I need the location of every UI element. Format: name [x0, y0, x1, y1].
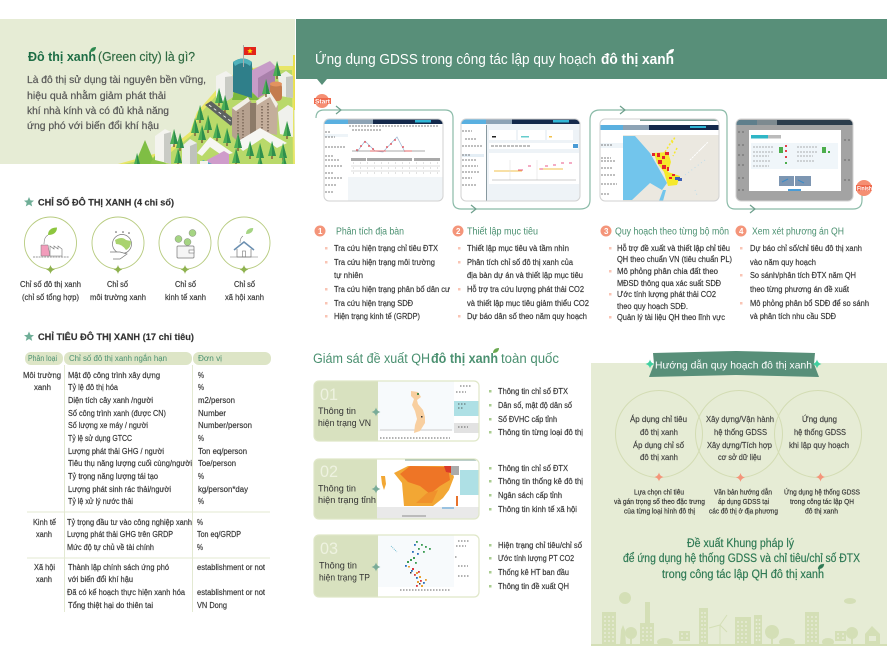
text: circle captions: Lựa chọn chỉ tiêu: [634, 488, 684, 496]
text: circle captions: đô thị xanh: [805, 508, 838, 516]
table rows: Xã hội: [34, 563, 55, 572]
table rows: %: [198, 472, 204, 481]
index: environment: Chỉ số: [107, 280, 128, 289]
text: circle captions: Ứng dụng hệ thống GDSS: [784, 488, 860, 496]
table rows: %: [198, 383, 204, 392]
step 3: sector planning: 3: [604, 227, 609, 236]
step 3: sector planning: QH theo chuẩn VN (tiêu chuẩn PL): [617, 255, 732, 264]
step 2: goal setting: 2: [456, 227, 461, 236]
index: society: [218, 217, 270, 302]
text: legal framework proposal: [623, 538, 860, 581]
header banner: GDSS application: Ứng dụng GDSS trong công tác lập quy hoạch: [315, 51, 596, 68]
table rows: Mức độ tự chủ về tài chính: [67, 543, 154, 552]
table rows: establishment or not: [197, 588, 266, 597]
table rows: %: [197, 543, 203, 552]
badge: start: Start: [315, 100, 330, 106]
badge: finish: Finish: [857, 186, 872, 192]
card 01: national status: 01: [320, 385, 338, 404]
step 2: goal setting: Dự báo dân số theo năm quy hoạch: [467, 312, 587, 321]
step 1: area analysis: Hiện trạng kinh tế (GRDP): [334, 312, 420, 321]
step 1: area analysis: Phân tích địa bàn: [336, 226, 404, 238]
table rows: Tỷ lệ xử lý nước thải: [68, 497, 133, 506]
text: circle captions: [614, 488, 860, 516]
step 2: goal setting: Thiết lập mục tiêu: [467, 226, 538, 238]
step 4: plan review: 4: [739, 227, 744, 236]
header banner: GDSS application: [296, 19, 887, 85]
table rows: %: [197, 518, 203, 527]
illustration: city skyline: [591, 592, 887, 646]
step 3: sector planning: theo quy hoạch SDĐ.: [617, 302, 688, 311]
text: circle captions: Văn bản hướng dẫn: [714, 488, 772, 496]
index: society: xã hội xanh: [225, 293, 264, 302]
index: environment: [90, 217, 146, 302]
text: circle captions: và gán trọng số theo đặc trưng: [614, 497, 705, 506]
table rows: Diện tích cây xanh /người: [68, 396, 153, 405]
card 03: city status: 03: [320, 539, 338, 558]
table rows: Số công trình xanh (được CN): [68, 409, 166, 418]
screenshot 4: plan review modal: [736, 119, 853, 201]
index: economy: Chỉ số: [175, 280, 196, 289]
index: composite: Chỉ số đô thị xanh: [20, 280, 81, 289]
text: circle captions: của từng loại hình đô thị: [624, 508, 695, 516]
circle: apply indicators: [616, 390, 702, 482]
circle: build GDSS system: hệ thống GDSS: [714, 427, 767, 437]
screenshot 3: land use map: [600, 119, 719, 201]
table rows: establishment or not: [197, 563, 266, 572]
circle: apply GDSS: [774, 390, 862, 482]
index: composite: [20, 217, 81, 302]
step 4: plan review: [736, 226, 869, 321]
badge: start: [314, 94, 331, 108]
text: legal framework proposal: để ứng dụng hệ thống GDSS và chỉ tiêu/chỉ số ĐTX: [623, 553, 860, 565]
table rows: Môi trường: [23, 371, 61, 380]
card 01: national status: hiện trạng VN: [318, 418, 371, 429]
card 03 bullets: Hiện trạng chỉ tiêu/chỉ số: [498, 541, 583, 550]
table rows: Tổng thiệt hại do thiên tai: [68, 601, 153, 610]
card 03 bullets: Ước tính lượng PT CO2: [498, 554, 574, 563]
table rows: Ton eq/person: [198, 447, 247, 456]
step 1: area analysis: [314, 226, 451, 321]
card 01 bullets: Số ĐVHC cấp tỉnh: [498, 415, 557, 424]
step 2: goal setting: Phân tích chỉ số đô thị xanh của: [467, 258, 574, 267]
table rows: Toe/person: [198, 459, 236, 468]
circle: apply GDSS: hệ thống GDSS: [794, 427, 846, 437]
step 3: sector planning: MĐSD thông qua xác suất SDĐ: [617, 279, 721, 288]
table rows: xanh: [36, 575, 52, 584]
panel: green city intro: [0, 19, 295, 173]
circle: build GDSS system: cơ sở dữ liệu: [718, 452, 761, 462]
table rows: kg/person*day: [198, 485, 248, 494]
table rows: Lượng phát sinh rác thải/người: [68, 485, 171, 494]
step 3: sector planning: Quy hoạch theo từng bộ môn: [615, 226, 729, 238]
table rows: Lượng phát thải GHG / người: [68, 447, 164, 456]
table rows: %: [198, 434, 204, 443]
index: environment: môi trường xanh: [90, 293, 146, 302]
text: circle captions: trong công tác lập QH: [790, 499, 854, 506]
table header: Phân loại: [28, 354, 57, 363]
text: definition paragraph: [27, 74, 206, 132]
screenshot 2: goal setting dashboard: [461, 119, 580, 201]
step 3: sector planning: Ước tính lượng phát thải CO2: [617, 290, 717, 299]
table rows: Ton eq/GRDP: [197, 530, 241, 539]
card 02: provincial status: hiện trạng tỉnh: [318, 495, 376, 506]
table: green city indicators: [23, 331, 271, 612]
card 02: provincial status: 02: [320, 462, 338, 481]
panel: green city indexes: [20, 196, 270, 302]
step 4: plan review: Mô phỏng phân bổ SDĐ để so sánh: [750, 299, 869, 308]
step 3: sector planning: Quản lý tài liệu QH theo lĩnh vực: [617, 313, 725, 322]
table rows: Tiêu thụ năng lượng cuối cùng/người: [68, 459, 192, 468]
circle: build GDSS system: Xây dựng/Tích hợp: [707, 440, 772, 450]
step 4: plan review: vào năm quy hoạch: [750, 258, 816, 267]
step 1: area analysis: Tra cứu hiện trạng SDĐ: [334, 299, 413, 308]
table rows: Tỷ lệ sử dụng GTCC: [68, 434, 132, 443]
step 1: area analysis: Tra cứu hiện trạng môi trường: [334, 258, 435, 267]
table rows: VN Dong: [197, 601, 227, 610]
step 1: area analysis: Tra cứu hiện trạng chỉ tiêu ĐTX: [334, 244, 439, 253]
card 02 bullets: Thông tin chỉ số ĐTX: [498, 464, 569, 473]
heading: four indexes: CHỈ SỐ ĐÔ THỊ XANH (4 chỉ số): [38, 196, 174, 208]
table rows: %: [198, 371, 204, 380]
text: definition paragraph: ứng phó với biến đổi khí hậu: [27, 120, 159, 132]
ribbon heading: [646, 351, 822, 377]
card 03 bullets: Thông tin đề xuất QH: [498, 582, 569, 591]
index: society: Chỉ số: [234, 280, 255, 289]
step 1: area analysis: tự nhiên: [334, 271, 363, 280]
circle: apply indicators: Áp dụng chỉ số: [633, 440, 684, 450]
table rows: Kinh tế: [33, 518, 57, 527]
circle: build GDSS system: Xây dựng/Vận hành: [706, 414, 774, 424]
table rows: Number: [198, 409, 226, 418]
table header: Đơn vị: [198, 354, 222, 363]
table rows: Số lượng xe máy / người: [68, 421, 148, 430]
text: legal framework proposal: trong công tác lập QH đô thị xanh: [662, 569, 824, 581]
heading: what is a green city: (Green city) là gì?: [98, 50, 195, 64]
heading: nationwide monitoring: đô thị xanh: [431, 351, 498, 366]
step 4: plan review: và phân tích nhu cầu SDĐ: [750, 312, 836, 321]
step 2: goal setting: và thiết lập mục tiêu giảm thiểu CO2: [467, 299, 590, 308]
card 02: provincial status: [314, 459, 479, 519]
index: economy: [159, 217, 211, 302]
card 02: provincial status: Thông tin: [318, 484, 356, 494]
table rows: Lượng phát thải GHG trên GRDP: [67, 530, 173, 539]
card 01 bullets: Dân số, mật độ dân số: [498, 401, 572, 410]
table rows: với biến đổi khí hậu: [68, 575, 133, 584]
card 01 bullets: Thông tin từng loại đô thị: [498, 428, 583, 437]
illustration: isometric green city: [118, 45, 295, 173]
ribbon heading: Hướng dẫn quy hoạch đô thị xanh: [655, 358, 812, 372]
step 3: sector planning: Mô phỏng phân chia đất theo: [617, 267, 719, 276]
table rows: Tỷ lệ đô thị hóa: [68, 383, 118, 392]
step 1: area analysis: 1: [318, 227, 323, 236]
heading: what is a green city: [28, 47, 195, 64]
flow arrow: start to finish: [316, 106, 862, 213]
heading: nationwide monitoring: toàn quốc: [501, 351, 559, 366]
text: circle captions: áp dụng GDSS tại: [718, 499, 769, 506]
step 2: goal setting: Hỗ trợ tra cứu lượng phát thải CO2: [467, 285, 585, 294]
step 4: plan review: theo từng phương án đề xuất: [750, 285, 850, 294]
table rows: Thành lập chính sách ứng phó: [68, 563, 170, 572]
circle: apply indicators: đô thị xanh: [640, 427, 678, 437]
text: legal framework proposal: Đề xuất Khung pháp lý: [687, 538, 794, 550]
table rows: Mật độ công trình xây dựng: [68, 371, 160, 380]
index: economy: kinh tế xanh: [165, 293, 206, 302]
card 02 bullets: Ngân sách cấp tỉnh: [498, 491, 562, 500]
step 2: goal setting: địa bàn dự án và thiết lập mục tiêu: [467, 271, 583, 280]
circle: build GDSS system: [696, 390, 782, 482]
table rows: Đã có kế hoạch thực hiện xanh hóa: [67, 588, 186, 597]
step 2: goal setting: Thiết lập mục tiêu và tầm nhìn: [467, 244, 569, 253]
header banner: GDSS application: đô thị xanh: [601, 51, 674, 68]
card 03: city status: hiện trạng TP: [319, 572, 370, 584]
text: definition paragraph: hiệu quả nhằm giảm phát thải: [27, 89, 166, 102]
badge: finish: [856, 180, 872, 196]
step 3: sector planning: [600, 226, 732, 322]
step 2: goal setting: [452, 226, 590, 321]
circle: apply GDSS: Ứng dụng: [802, 414, 837, 424]
icon: Vietnamese flag: [243, 45, 256, 67]
table rows: %: [198, 497, 204, 506]
text: definition paragraph: Là đô thị sử dụng tài nguyên bền vững,: [27, 74, 206, 86]
heading: 17 indicators: CHỈ TIÊU ĐÔ THỊ XANH (17 chỉ tiêu): [38, 331, 194, 343]
table header: [25, 352, 271, 365]
card 03 bullets: [489, 541, 583, 591]
table rows: xanh: [36, 530, 52, 539]
circle: apply indicators: đô thị xanh: [640, 452, 678, 462]
card 03: city status: [314, 535, 479, 597]
card 03 bullets: Thống kê HT ban đầu: [498, 568, 569, 577]
table rows: m2/person: [198, 396, 235, 405]
step 1: area analysis: Tra cứu hiện trạng phân bố dân cư: [334, 285, 451, 294]
table rows: Tỷ trọng đầu tư vào công nghiệp xanh: [67, 518, 192, 527]
panel: planning guidance: [591, 351, 887, 646]
step 4: plan review: Dự báo chỉ số/chỉ tiêu đô thị xanh: [750, 244, 862, 253]
card 01 bullets: [489, 387, 583, 437]
card 03: city status: Thông tin: [319, 560, 357, 572]
text: definition paragraph: khí nhà kính và có đủ khả năng: [27, 105, 169, 117]
heading: what is a green city: Đô thị xanh: [28, 50, 96, 64]
card 01: national status: Thông tin: [318, 406, 356, 417]
index: composite: (chỉ số tổng hợp): [22, 293, 79, 302]
circle: apply indicators: Áp dụng chỉ tiêu: [630, 414, 687, 424]
card 01 bullets: Thông tin chỉ số ĐTX: [498, 387, 569, 396]
screenshot 1: area analysis dashboard: [324, 119, 443, 201]
card 01: national status: [314, 381, 479, 441]
card 02 bullets: Thông tin thống kê đô thị: [498, 477, 583, 486]
card 02 bullets: [489, 464, 583, 514]
table rows: [23, 371, 266, 610]
step 4: plan review: Xem xét phương án QH: [752, 226, 844, 238]
table rows: Tỷ trọng năng lượng tái tạo: [68, 472, 159, 481]
table header: Chỉ số đô thị xanh ngắn hạn: [69, 354, 167, 363]
circle: apply GDSS: khi lập quy hoạch: [789, 440, 849, 450]
heading: nationwide monitoring: [313, 348, 559, 366]
table rows: Number/person: [198, 421, 252, 430]
step 4: plan review: So sánh/phân tích ĐTX năm QH: [750, 271, 856, 280]
table rows: xanh: [34, 383, 51, 392]
heading: nationwide monitoring: Giám sát đề xuất QH: [313, 351, 430, 366]
card 02 bullets: Thông tin kinh tế xã hội: [498, 505, 577, 514]
step 3: sector planning: Hỗ trợ đề xuất và thiết lập chỉ tiêu: [617, 244, 730, 253]
text: circle captions: các đô thị ở địa phương: [709, 508, 778, 516]
